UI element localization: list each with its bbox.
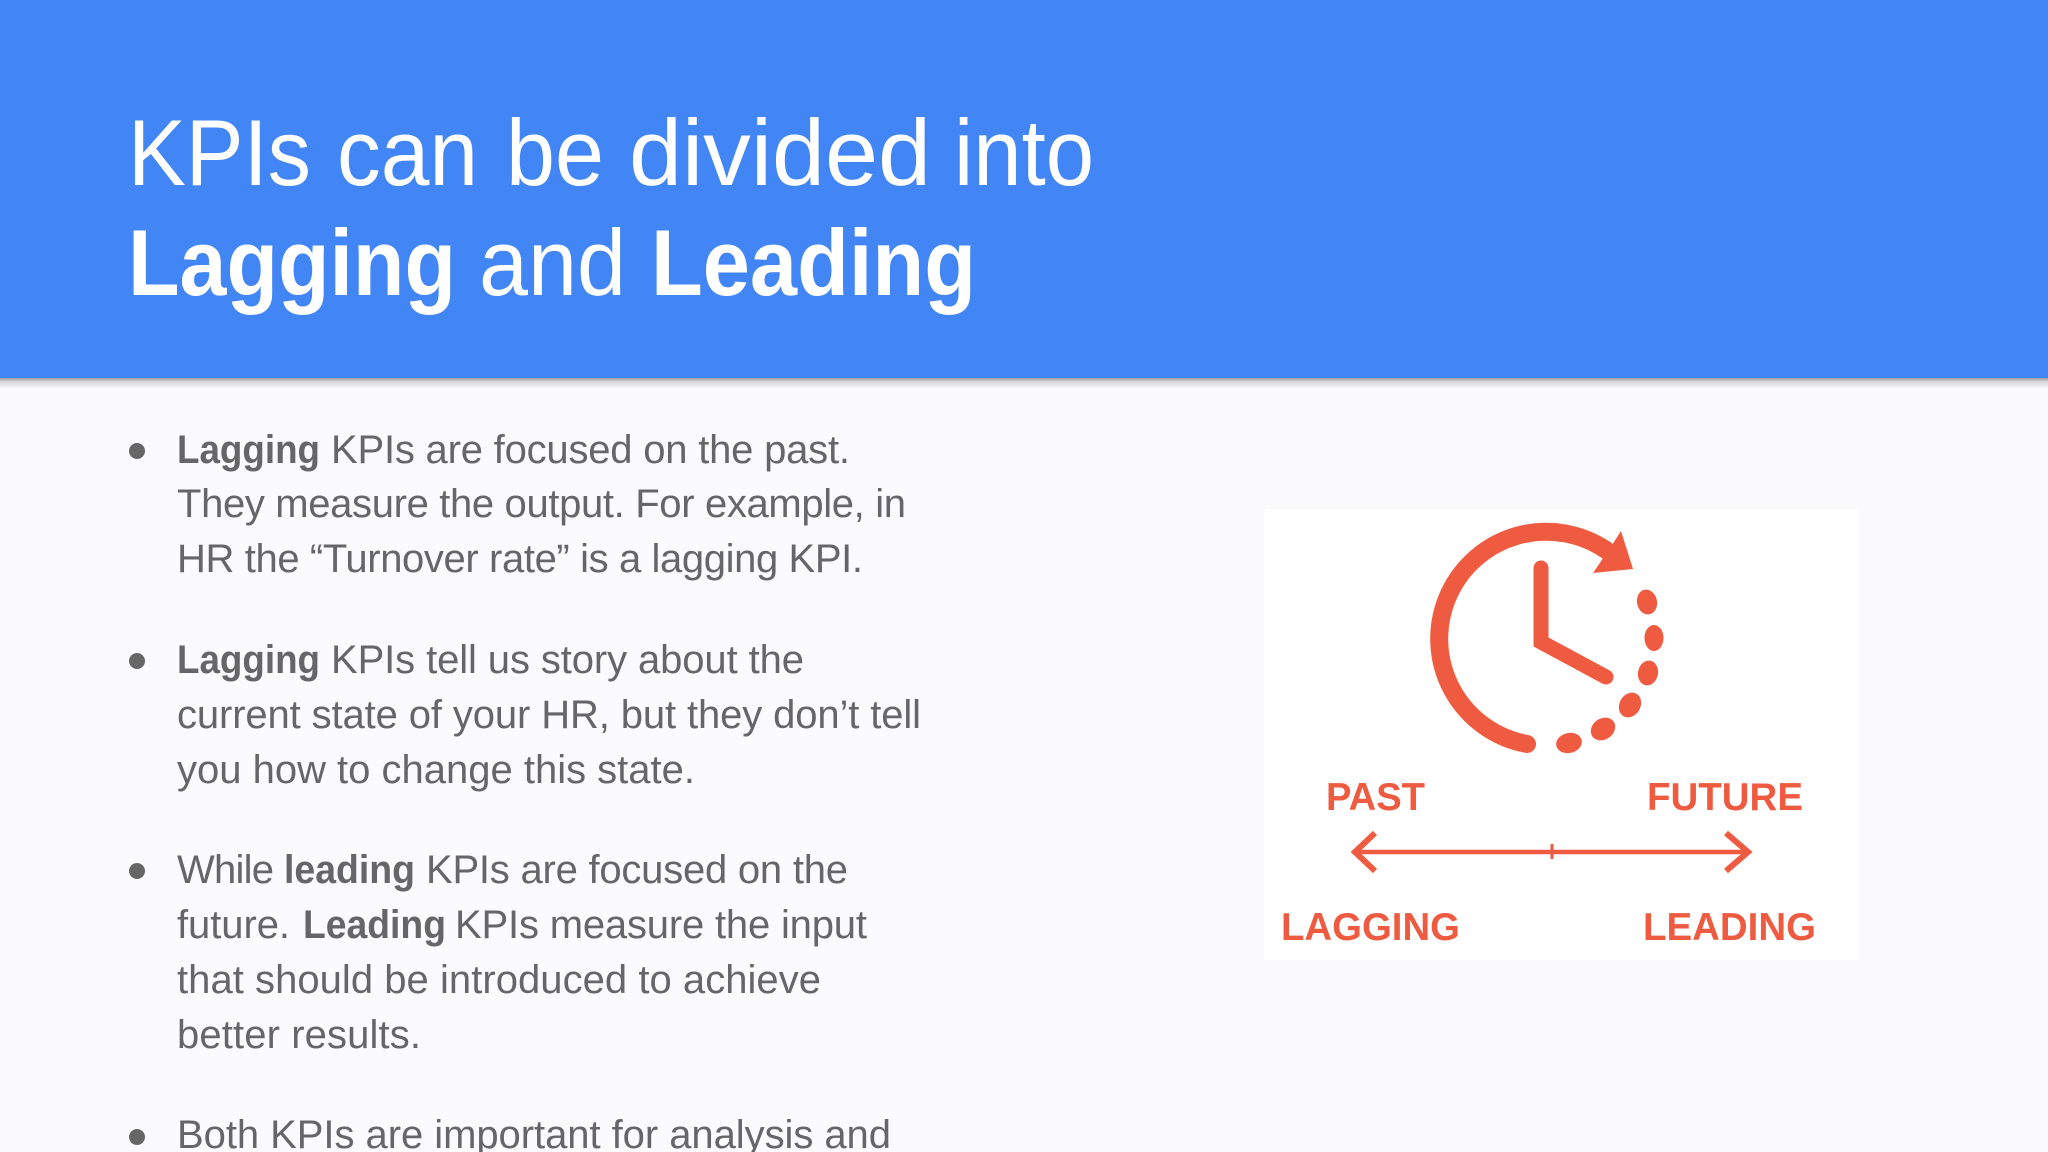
bullet 3: leading focus on the future: leading <box>284 848 415 892</box>
label: leading: LEADING <box>1643 906 1816 949</box>
label: past: PAST <box>1326 776 1425 819</box>
bullet 3: leading focus on the future: KPIs are focused on the <box>426 848 848 892</box>
icon: clock with arrow <box>1439 531 1664 755</box>
label: lagging: LAGGING <box>1281 906 1460 949</box>
title: Leading <box>651 210 976 315</box>
bullet 1: lagging focus on the past: They measure the output. For example, in <box>177 482 906 526</box>
title: be <box>506 100 604 205</box>
panel: clock diagram <box>1265 509 1859 960</box>
bullet 3: leading focus on the future: better results. <box>177 1013 421 1057</box>
bullet 2: lagging tells a story: KPIs tell us story about the <box>331 638 804 682</box>
bullet 3: leading focus on the future: While <box>177 848 274 892</box>
bullet 3: leading focus on the future: that should be introduced to achieve <box>177 958 821 1002</box>
label: future: FUTURE <box>1647 776 1803 819</box>
title: KPIs <box>128 100 311 205</box>
bullet 3: leading focus on the future: KPIs measure the input <box>455 903 867 947</box>
title: can <box>337 100 478 205</box>
bullet 2: lagging tells a story <box>129 638 921 792</box>
bullet 2: lagging tells a story: current state of your HR, but they don’t tell <box>177 693 921 737</box>
title: Lagging <box>128 210 456 315</box>
bullet 3: leading focus on the future: Leading <box>303 903 446 947</box>
title: into <box>954 100 1094 205</box>
title: and <box>479 210 626 315</box>
bullet 1: lagging focus on the past: HR the “Turnover rate” is a lagging KPI. <box>177 537 863 581</box>
title <box>128 100 1094 315</box>
arrow: past to future timeline <box>1355 833 1748 871</box>
bullet 2: lagging tells a story: you how to change this state. <box>177 748 695 792</box>
bullet 3: leading focus on the future <box>129 848 867 1057</box>
bullet 1: lagging focus on the past <box>129 428 906 581</box>
bullet 3: leading focus on the future: future. <box>177 903 290 947</box>
header band <box>0 0 2048 389</box>
bullet 2: lagging tells a story: Lagging <box>177 638 320 682</box>
bullet list <box>129 428 921 1152</box>
bullet 1: lagging focus on the past: Lagging <box>177 428 320 472</box>
bullet 1: lagging focus on the past: KPIs are focused on the past. <box>331 428 850 472</box>
title: divided <box>629 100 931 205</box>
